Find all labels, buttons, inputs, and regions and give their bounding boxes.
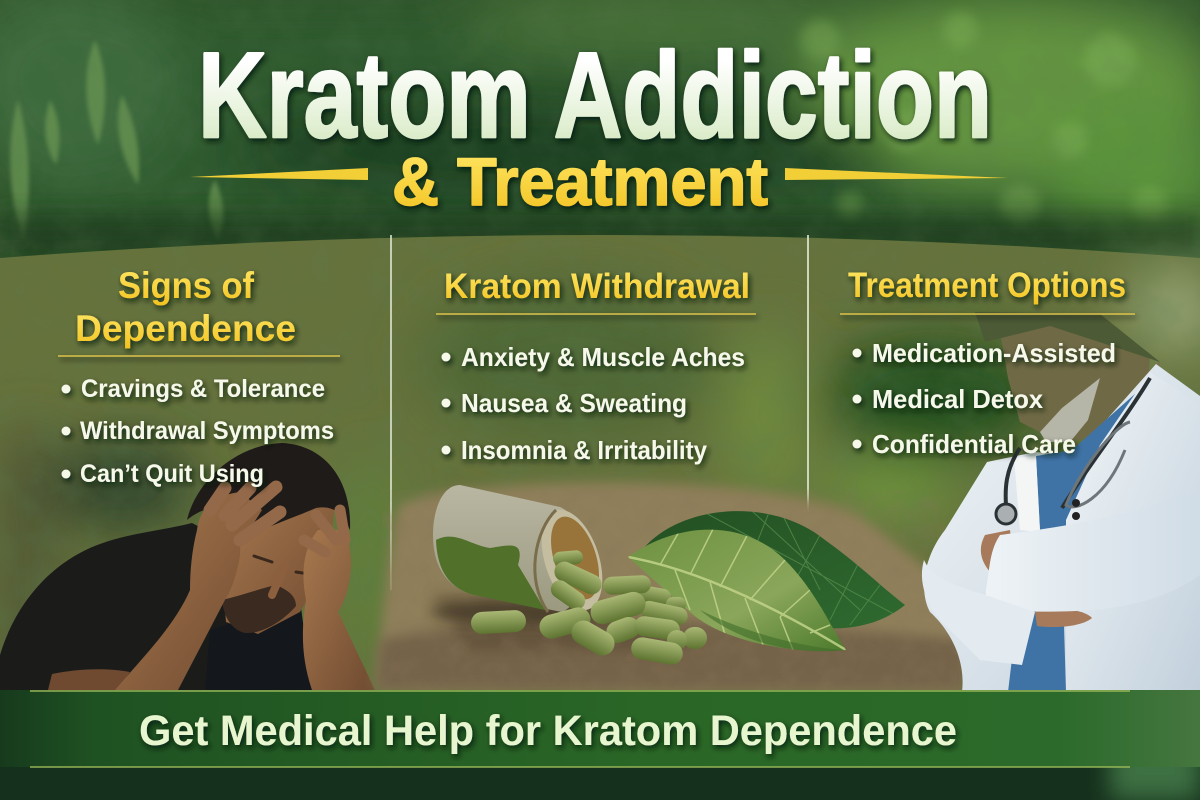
list: withdrawal: Nausea & Sweating (461, 388, 687, 418)
list: withdrawal (442, 342, 745, 465)
crossed arms (981, 530, 1015, 572)
illustration: doctor (922, 312, 1200, 692)
list: signs: Withdrawal Symptoms (80, 417, 334, 445)
right hand (303, 530, 375, 690)
panel: treatment options (840, 266, 1135, 459)
title rule left (190, 168, 368, 180)
illustration: capsules (470, 550, 707, 666)
list: signs: Cravings & Tolerance (81, 375, 325, 403)
list: signs: Can’t Quit Using (80, 460, 264, 488)
mottled texture (2, 240, 1168, 456)
heading: kratom withdrawal: Kratom Withdrawal (444, 267, 750, 306)
title: Kratom Addiction: Kratom Addiction (198, 27, 992, 163)
coat (924, 364, 1200, 692)
list: treatment: Medication-Assisted (872, 338, 1116, 368)
stethoscope (1006, 378, 1150, 508)
panel colour patches (0, 265, 1200, 690)
list: signs (62, 375, 334, 488)
face (222, 495, 335, 634)
list: treatment (852, 338, 1116, 459)
dark band under title (0, 215, 1200, 260)
panel: kratom withdrawal (436, 267, 756, 465)
banner text: Get Medical Help for Kratom Dependence (139, 707, 957, 755)
subtitle: & Treatment: & Treatment (392, 144, 768, 220)
list: withdrawal: Anxiety & Muscle Aches (461, 342, 745, 372)
illustration: ground (376, 482, 965, 690)
heading: treatment options: Treatment Options (848, 266, 1126, 305)
illustration: kratom leaves (628, 500, 905, 655)
scrubs (1008, 385, 1145, 692)
bokeh foliage (800, 12, 1168, 225)
hanging leaves top left (10, 40, 223, 240)
list: treatment: Confidential Care (872, 429, 1076, 459)
list: treatment: Medical Detox (872, 384, 1044, 414)
panel dividers (391, 235, 808, 590)
title rule right (785, 168, 1008, 180)
heading: signs of dependence: Signs of (118, 265, 255, 306)
banner: call to action (0, 690, 1200, 767)
illustration: spilled bottle (430, 485, 614, 624)
heading: signs of dependence (75, 265, 296, 349)
panel: signs of dependence (58, 265, 340, 488)
head (1000, 318, 1150, 442)
lower dark band (0, 767, 1200, 800)
olive panel band (0, 235, 1200, 690)
illustration: stressed man (0, 443, 375, 690)
left hand (115, 492, 262, 690)
list: withdrawal: Insomnia & Irritability (461, 435, 707, 465)
hair (187, 443, 350, 530)
heading: signs of dependence: Dependence (75, 308, 296, 349)
